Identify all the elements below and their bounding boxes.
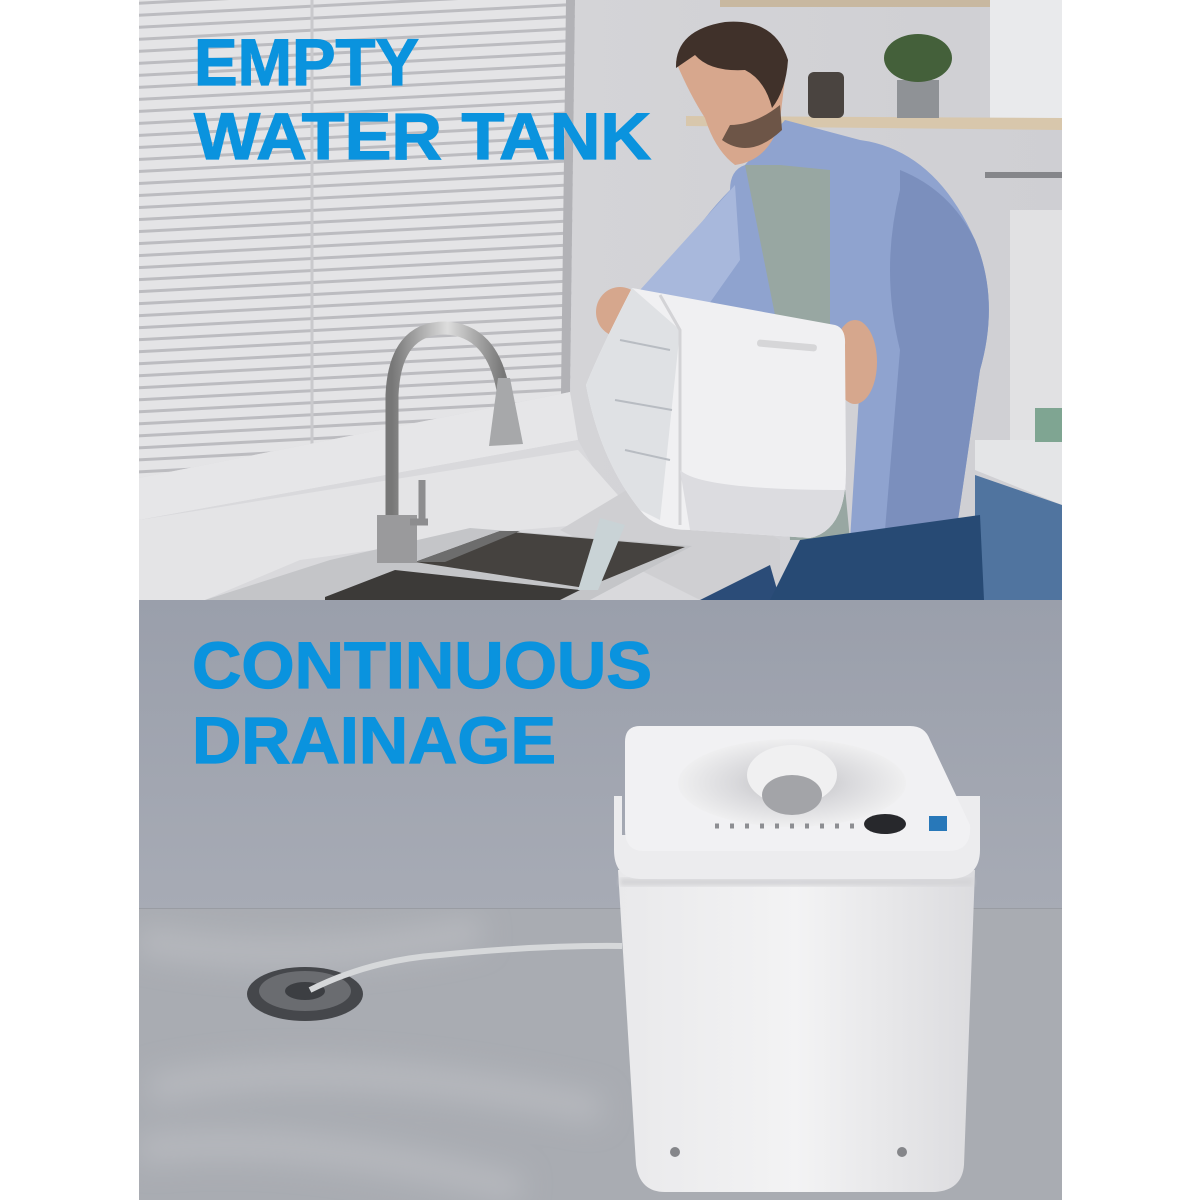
water tank [586,288,846,538]
energy label [929,816,947,831]
faucet [377,328,523,563]
fan grille [678,739,906,827]
heading: empty water tank: EMPTY [194,25,419,99]
water stream [578,518,625,590]
left sleeve [610,185,740,345]
floor drain [247,967,363,1021]
panel: continuous drainage photo [139,600,1062,1200]
heading: empty water tank: WATER TANK [194,99,651,173]
t-shirt [745,165,850,540]
shirt shading [885,170,989,530]
body [618,870,975,1192]
man pouring water [596,22,989,600]
kitchen sink [205,528,780,600]
body shadow under band [620,878,973,886]
window blinds [139,0,575,478]
pants [770,515,984,600]
heading: continuous drainage [192,628,652,777]
drain hose [310,946,622,990]
heading: continuous drainage: DRAINAGE [192,703,556,777]
top panel [625,726,970,851]
hands [596,287,644,337]
dehumidifier [614,726,980,1192]
heading: empty water tank [194,25,651,173]
window sill and counter [139,392,578,520]
handle band [614,796,980,879]
right wall, shelf, plant [686,0,1062,600]
head [676,23,786,165]
control panel [715,824,860,828]
shirt [660,120,989,540]
marble floor [139,908,1062,1200]
display [864,814,906,834]
screws [670,1147,680,1157]
panel: empty water tank photo [139,0,1062,600]
heading: continuous drainage: CONTINUOUS [192,628,652,702]
